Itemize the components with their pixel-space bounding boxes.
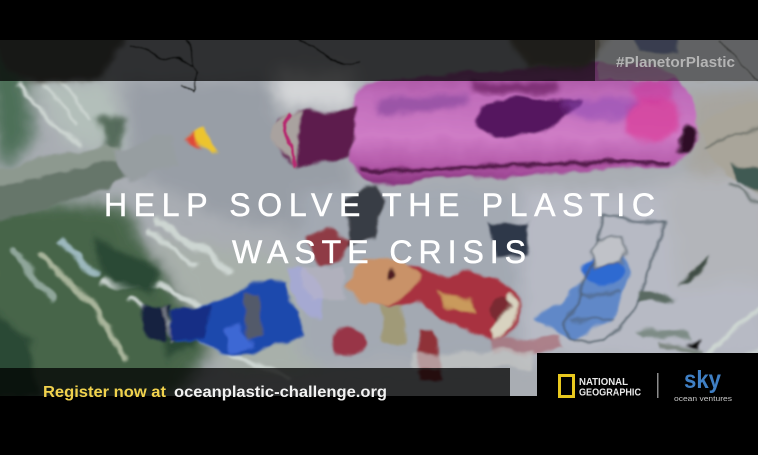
logo panel [537,353,758,396]
register call to action: Register now at [43,384,166,401]
register call to action [43,384,387,401]
light ripples on plastic [15,78,758,380]
headline line 1: HELP SOLVE THE PLASTIC [104,187,655,223]
clear bottle neck, right [704,125,758,205]
Sky Ocean Ventures logo: ocean ventures [674,396,733,403]
outlined clear bottle with blue label [535,215,708,348]
clear bottle, left [0,144,146,222]
purple bottle [273,63,698,184]
National Geographic logo: NATIONAL [579,376,629,388]
water and pale plastic tones [0,40,758,400]
headline line 2: WASTE CRISIS [232,234,526,270]
National Geographic logo [560,376,641,398]
Sky Ocean Ventures logo: sky [684,366,721,394]
background photo: plastic bottles in water [0,40,758,401]
bottom black bar [0,396,758,455]
Sky Ocean Ventures logo [674,366,733,403]
bottom dark overlay band [0,368,510,396]
logo divider [657,373,658,398]
top right lighter overlay band [595,40,758,81]
top dark overlay band [0,40,595,81]
dark green shadows [0,115,200,400]
register call to action: oceanplastic-challenge.org [174,384,387,401]
National Geographic logo: GEOGRAPHIC [579,386,641,398]
red-speckled plastic and blue cap [285,185,560,380]
hashtag: #PlanetorPlastic [616,55,735,71]
toy-shaped juice bottle [345,258,520,342]
dark strands at top [130,40,758,92]
blue bottle [142,282,305,354]
yellow and red fragment [181,129,217,153]
